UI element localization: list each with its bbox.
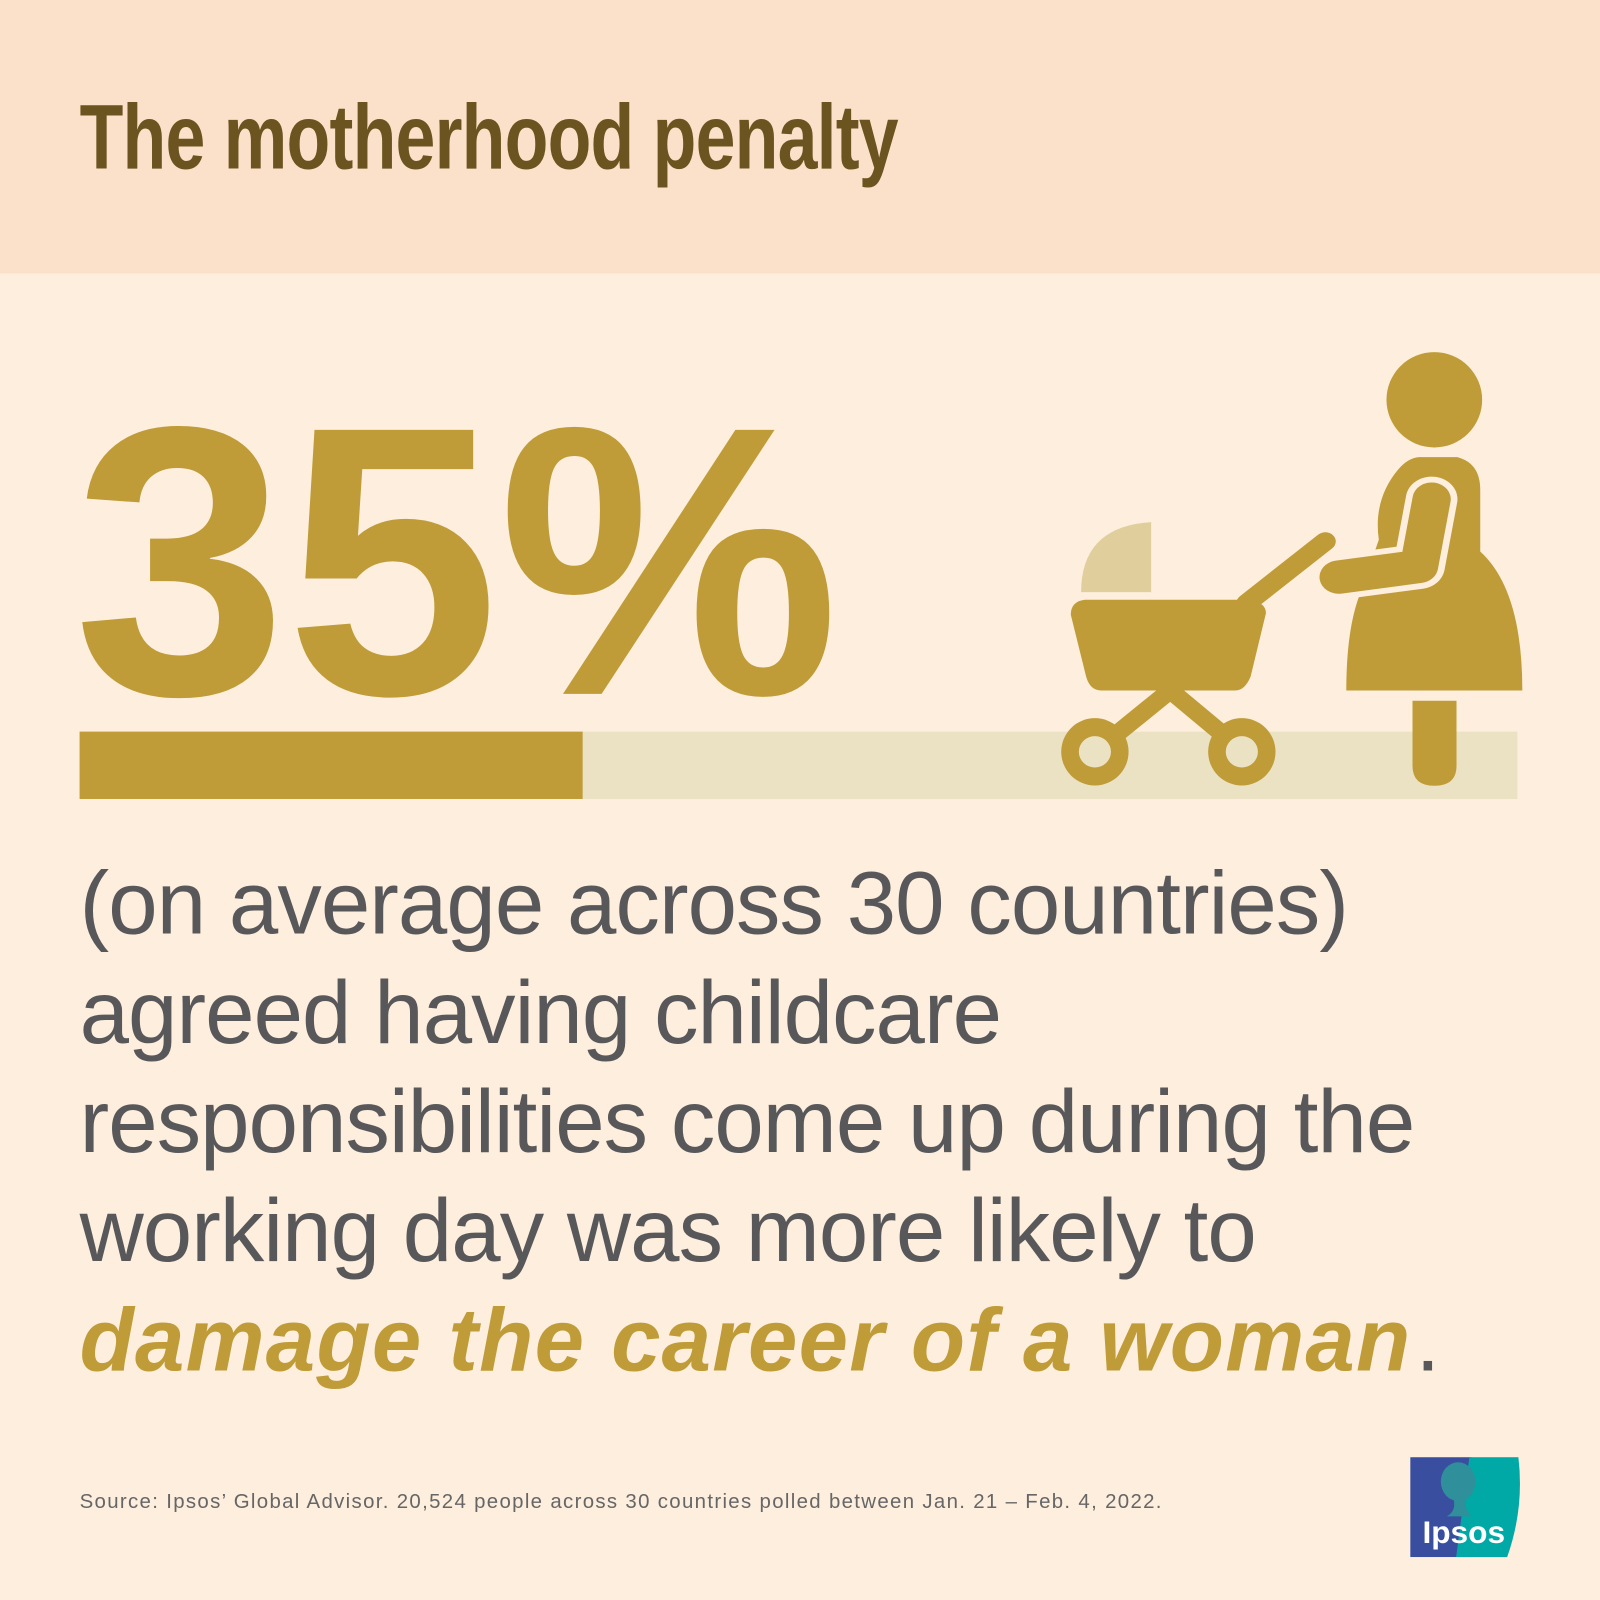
bar fill 35% <box>80 732 583 799</box>
source note: Source: Ipsos’ Global Advisor. 20,524 people across 30 countries polled between Jan. 21 – Feb. 4, 2022. <box>80 1491 1163 1513</box>
header band <box>0 0 1600 273</box>
body text <box>80 854 1440 1390</box>
body text: agreed having childcare <box>80 963 1001 1062</box>
big statistic 35%: 35% <box>73 347 838 776</box>
body text: (on average across 30 countries) <box>80 854 1348 953</box>
body text: working day was more likely to <box>80 1182 1256 1281</box>
logo: Ipsos: Ipsos <box>1422 1514 1505 1550</box>
progress bar <box>80 732 1517 799</box>
body text: damage the career of a woman. <box>80 1291 1440 1390</box>
body text: responsibilities come up during the <box>80 1072 1414 1171</box>
title: The motherhood penalty <box>80 87 898 189</box>
icon: mother with pram <box>1061 352 1522 786</box>
logo: Ipsos <box>1410 1457 1520 1558</box>
